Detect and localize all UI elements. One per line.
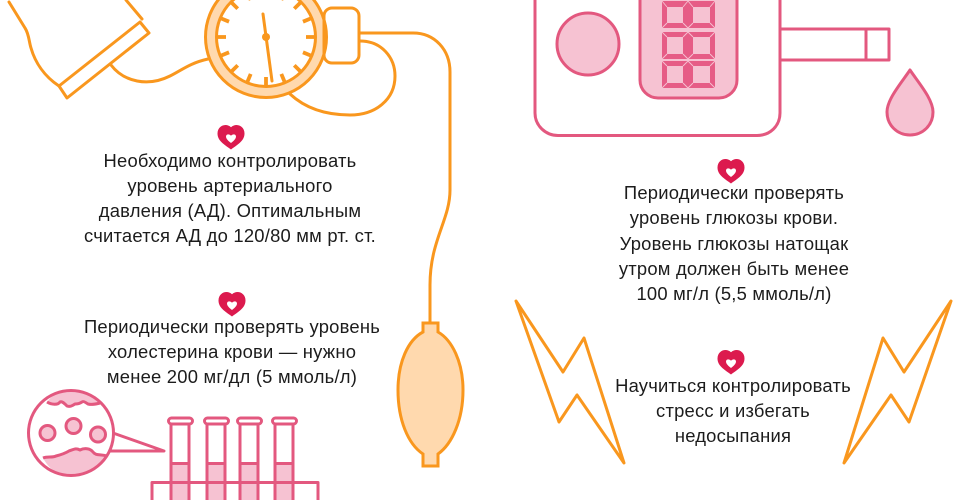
- icon: blood pressure cuff: [9, 0, 149, 98]
- icon: glucose meter: [535, 0, 780, 136]
- text block: cholesterol: холестерина крови — нужно: [108, 341, 356, 362]
- icon: heart 2: [218, 292, 246, 316]
- text block: glucose: Уровень глюкозы натощак: [620, 233, 849, 254]
- text block: blood pressure: [84, 150, 376, 246]
- text block: blood pressure: Необходимо контролировать: [104, 150, 356, 171]
- text block: glucose: 100 мг/л (5,5 ммоль/л): [636, 283, 832, 304]
- icon: pressure gauge: [206, 0, 326, 98]
- icon: heart 3: [718, 159, 744, 184]
- icon: connecting tube to gauge: [111, 59, 208, 82]
- text block: glucose: утром должен быть менее: [619, 258, 849, 279]
- icon: test tubes in rack: [152, 418, 318, 500]
- text block: blood pressure: считается АД до 120/80 мм рт. ст.: [84, 225, 376, 246]
- text block: stress: [615, 375, 851, 446]
- icon: blood drop: [887, 70, 933, 135]
- icon: gauge valve: [324, 8, 359, 63]
- icon: left lightning: [516, 301, 624, 463]
- text block: stress: недосыпания: [675, 425, 791, 446]
- text block: stress: Научиться контролировать: [615, 375, 851, 396]
- text block: cholesterol: менее 200 мг/дл (5 ммоль/л): [107, 366, 357, 387]
- text block: stress: стресс и избегать: [656, 400, 810, 421]
- icon: heart 1: [218, 125, 244, 150]
- text block: glucose: уровень глюкозы крови.: [630, 207, 838, 228]
- icon: rubber bulb: [398, 323, 463, 466]
- text block: cholesterol: Периодически проверять уровень: [84, 316, 380, 337]
- text block: glucose: [619, 182, 849, 304]
- text block: glucose: Периодически проверять: [624, 182, 844, 203]
- icon: tube to bulb: [360, 33, 450, 323]
- icon: magnified blood vessel: [28, 390, 164, 476]
- text block: cholesterol: [84, 316, 380, 387]
- text block: blood pressure: давления (АД). Оптимальным: [99, 200, 361, 221]
- digit segments: [662, 1, 715, 88]
- icon: right lightning: [844, 301, 951, 463]
- icon: loop tube: [290, 41, 395, 115]
- icon: test strip: [780, 29, 889, 60]
- text block: blood pressure: уровень артериального: [127, 175, 333, 196]
- icon: heart 4: [718, 350, 744, 374]
